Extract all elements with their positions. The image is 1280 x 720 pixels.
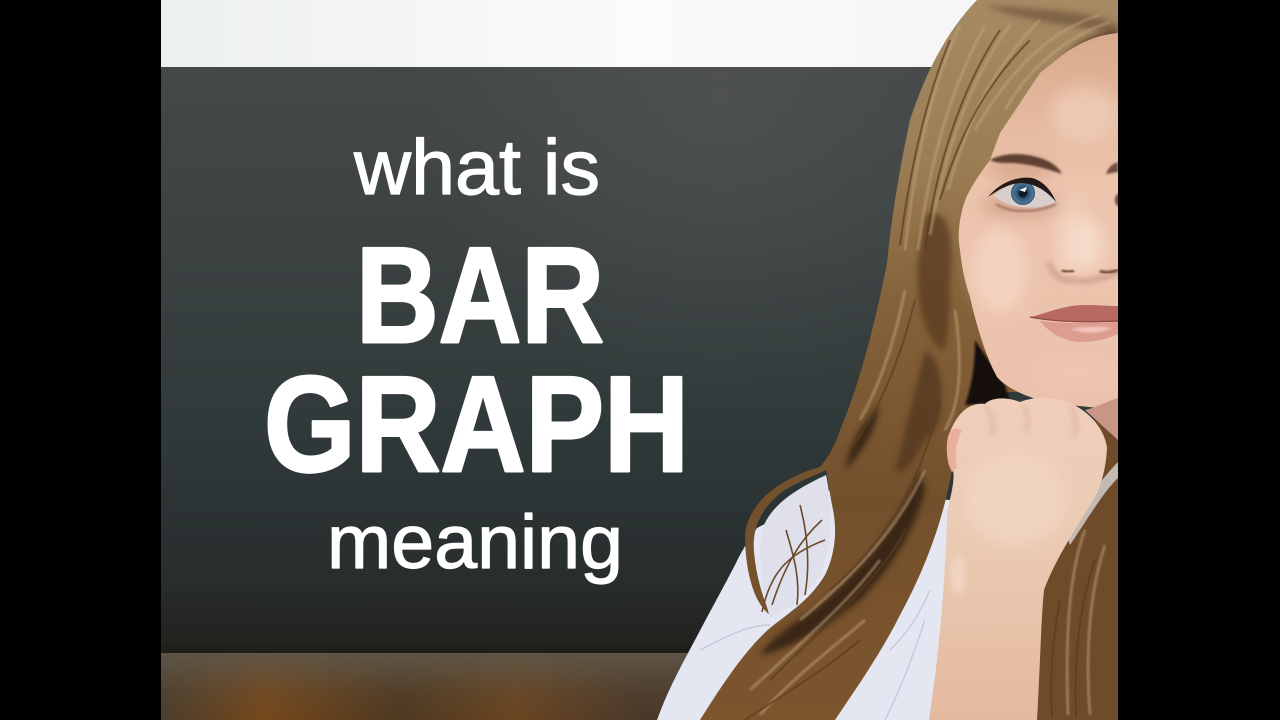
- forehead and cheek shading: [964, 84, 1118, 312]
- dark title panel: [161, 67, 1118, 653]
- heading: meaning: meaning: [327, 500, 623, 585]
- heading: what is: what is: [353, 123, 600, 211]
- right eye fragment: [1115, 194, 1121, 206]
- eye: [988, 178, 1056, 211]
- bottom blurred orange band: [161, 653, 1118, 720]
- main hair mass: [700, 0, 1118, 720]
- white shirt seen through hair: [761, 475, 830, 618]
- heading: GRAPH: GRAPH: [264, 348, 689, 500]
- shirt: [657, 490, 950, 720]
- face: [959, 33, 1118, 410]
- hair strands over shirt: [762, 505, 825, 612]
- portrait of woman: [657, 0, 1121, 720]
- hair strands light: [750, 15, 1110, 715]
- hair back, right side and behind neck: [1030, 420, 1118, 720]
- dark shadow under jaw: [965, 340, 1010, 405]
- hair shadow areas: [760, 5, 1118, 655]
- right eyebrow fragment: [1106, 162, 1118, 174]
- arm and fist: [929, 398, 1118, 720]
- top white band: [161, 0, 1118, 67]
- hair strands dark: [745, 30, 1095, 720]
- lips: [1030, 305, 1118, 342]
- nose: [1049, 219, 1118, 281]
- eyebrow: [990, 154, 1062, 174]
- shirt fold shading: [700, 590, 930, 720]
- heading: BAR: BAR: [356, 219, 604, 371]
